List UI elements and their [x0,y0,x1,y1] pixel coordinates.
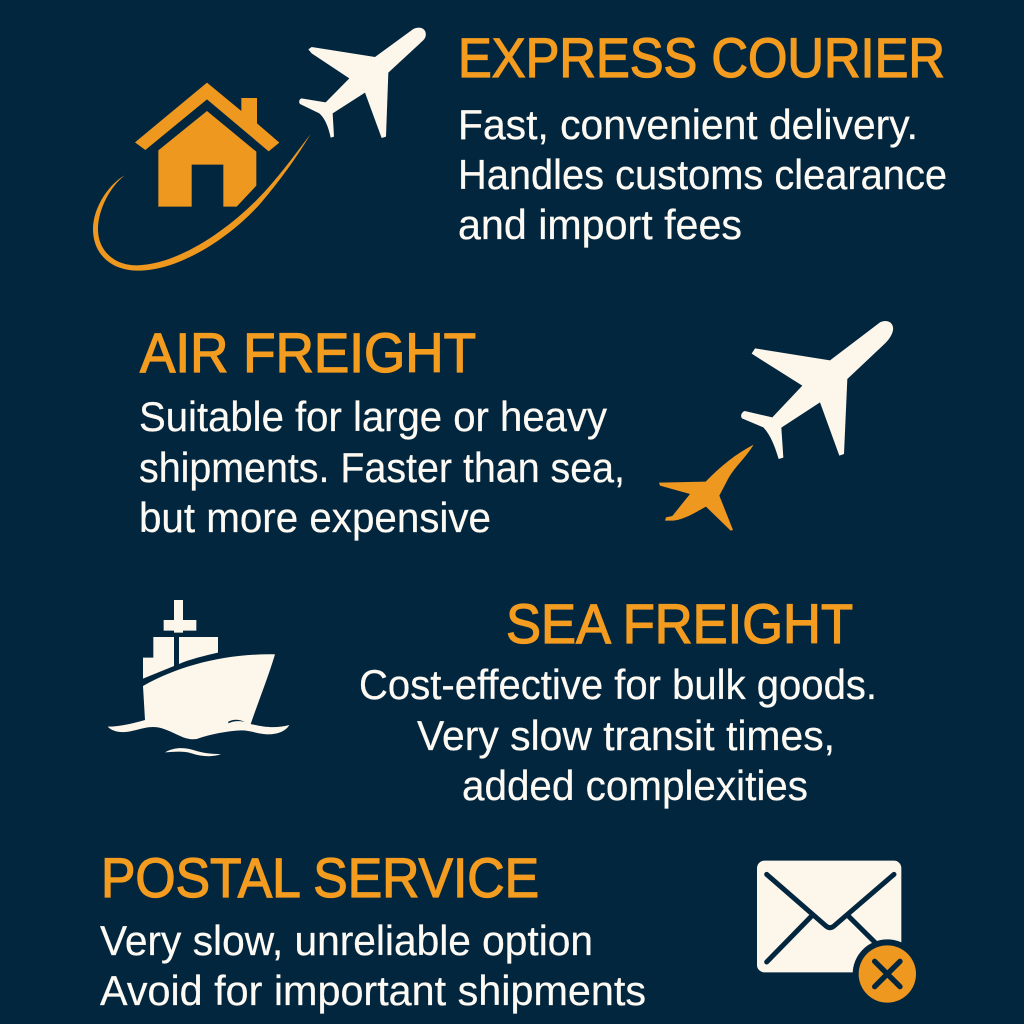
heading: express courier: EXPRESS COURIER [458,26,945,89]
text: sea freight description [359,661,877,809]
text: air freight description: shipments. Faster than sea, [139,444,625,491]
text: express courier description: Handles customs clearance [458,151,947,198]
panel: postal service [100,846,922,1014]
heading: air freight: AIR FREIGHT [140,321,476,384]
icon: envelope with failure badge [757,861,922,1009]
text: express courier description [458,101,947,248]
icon: container ship [108,600,289,756]
text: air freight description: but more expensive [139,494,491,541]
icon: small orange airplane [659,445,754,531]
text: sea freight description: Very slow transit times, [417,712,835,759]
panel: air freight [139,321,893,541]
text: sea freight description: added complexities [462,762,808,809]
panel: sea freight [108,592,877,809]
text: air freight description: Suitable for large or heavy [139,393,607,440]
icon: white airplane [299,28,426,138]
text: air freight description [139,393,625,541]
text: express courier description: Fast, convenient delivery. [458,101,918,148]
icon: house with orbit swoosh [93,83,311,271]
text: postal service description [100,917,646,1014]
text: postal service description: Avoid for important shipments [100,967,646,1014]
icon: large white airplane [741,321,893,459]
text: sea freight description: Cost-effective for bulk goods. [359,661,877,708]
text: express courier description: and import fees [458,201,742,248]
text: postal service description: Very slow, unreliable option [100,917,593,964]
heading: postal service: POSTAL SERVICE [101,846,539,909]
panel: express courier [93,26,947,271]
heading: sea freight: SEA FREIGHT [506,592,853,655]
